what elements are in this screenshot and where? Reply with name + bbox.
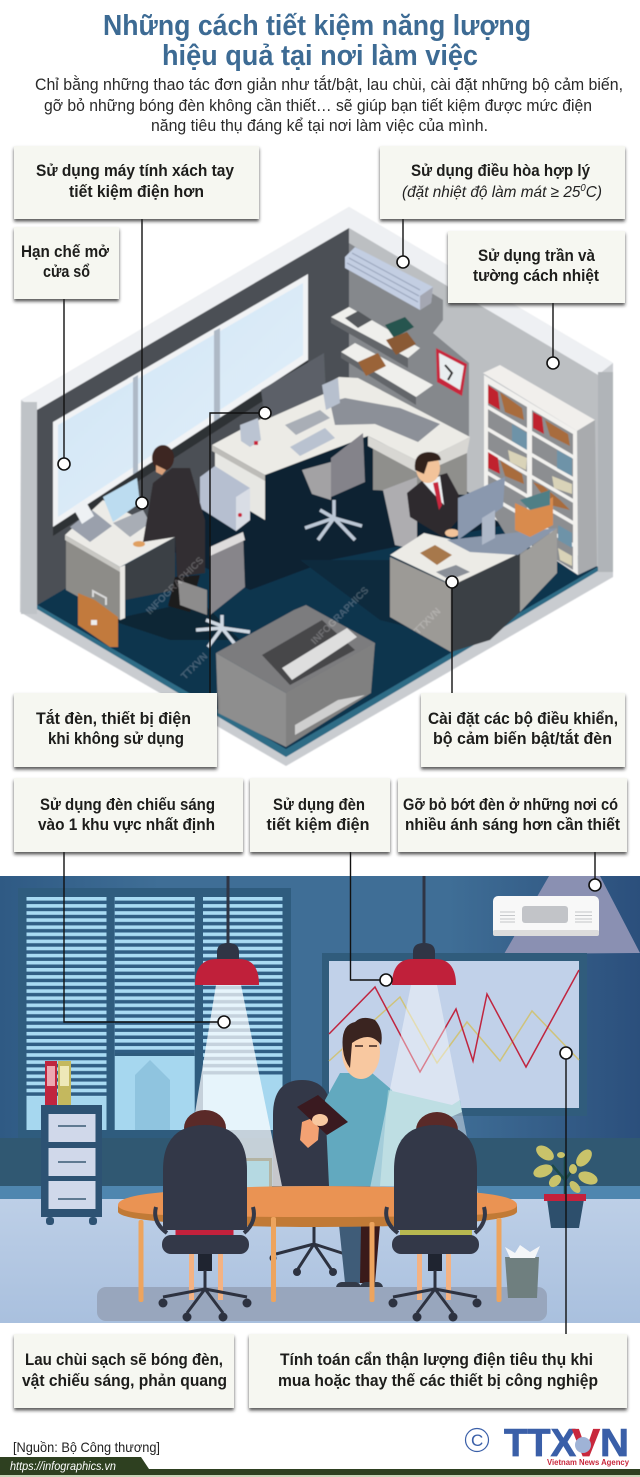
wall clock	[436, 348, 467, 396]
filing cabinet and folders	[41, 1061, 102, 1225]
callout: sensors: bộ cảm biến bật/tắt đèn	[433, 729, 612, 748]
logo: TTXVN: N	[600, 1422, 629, 1465]
lamp light cones	[183, 985, 480, 1203]
wall shelves with books	[331, 307, 433, 405]
callout: switch off: khi không sử dụng	[48, 730, 184, 748]
plant	[532, 1142, 599, 1228]
source note: [Nguồn: Bộ Công thương]	[13, 1439, 160, 1455]
front desk with monitor	[390, 477, 557, 652]
back office chair	[270, 1080, 345, 1276]
laptop	[245, 1158, 280, 1203]
callout: insulation: Sử dụng trần và	[478, 247, 596, 265]
callout: cleaning	[14, 1334, 234, 1408]
footer bar	[0, 1457, 640, 1477]
callout: air conditioning	[380, 146, 625, 219]
intro text: năng tiêu thụ đáng kể tại nơi làm việc của mình.	[151, 117, 488, 135]
L-shaped desk with computer	[212, 353, 470, 520]
watermarks: INFOGRAPHICS	[144, 555, 207, 617]
trash bin	[505, 1245, 540, 1298]
connector lines and dots	[58, 219, 601, 1334]
isometric office illustration	[20, 207, 613, 766]
air conditioner	[345, 247, 433, 310]
left foreground seated person and chair	[155, 1110, 254, 1322]
callout: switch off: Tắt đèn, thiết bị điện	[36, 709, 191, 728]
intro text: Chỉ bằng những thao tác đơn giản như tắt/bật, lau chùi, cài đặt những bộ cảm biến,	[35, 75, 623, 94]
watermarks	[144, 555, 443, 682]
callout: task lighting: Sử dụng đèn chiếu sáng	[40, 796, 215, 814]
callout: efficient lamps: Sử dụng đèn	[273, 796, 365, 814]
office chair lower left	[178, 532, 250, 648]
rug	[97, 1287, 547, 1321]
dado and floor	[0, 1138, 640, 1323]
callout: switch off	[14, 693, 217, 767]
computer tower on floor	[200, 466, 250, 531]
title	[103, 10, 531, 72]
callout: cleaning: vật chiếu sáng, phản quang	[22, 1372, 227, 1390]
callout: air conditioning: (đặt nhiệt độ làm mát ≥ 25	[402, 184, 588, 201]
callout: task lighting	[14, 778, 243, 852]
callout: windows: Hạn chế mở	[21, 243, 109, 261]
intro text: gỡ bỏ những bóng đèn không cần thiết… sẽ giúp bạn tiết kiệm được mức điện	[44, 97, 592, 115]
wall	[0, 876, 640, 1138]
callout: sensors	[421, 693, 625, 767]
briefcase	[78, 591, 118, 647]
title: Những cách tiết kiệm năng lượng	[103, 10, 531, 42]
office chair upper center	[302, 433, 365, 540]
callout: laptop	[14, 146, 259, 219]
watermarks: INFOGRAPHICS	[309, 585, 372, 647]
callout: cleaning: Lau chùi sạch sẽ bóng đèn,	[25, 1351, 223, 1369]
callout: insulation	[448, 231, 625, 303]
logo: TTXVN: V	[572, 1422, 600, 1465]
callout: insulation: tường cách nhiệt	[473, 267, 599, 285]
callout: remove lamps: Gỡ bỏ bớt đèn ở những nơi có	[403, 796, 618, 814]
logo: TTXVN: Vietnam News Agency	[547, 1458, 630, 1467]
callout: efficient lamps: tiết kiệm điện	[266, 816, 370, 834]
callout: efficient lamps	[250, 778, 390, 852]
right foreground seated person and chair	[386, 1112, 485, 1322]
callout: industrial equipment: Tính toán cẩn thận lượng điện tiêu thụ khi	[280, 1351, 593, 1369]
callout: industrial equipment: mua hoặc thay thế các thiết bị công nghiệp	[278, 1372, 598, 1390]
intro text	[35, 75, 623, 135]
callout: air conditioning: Sử dụng điều hòa hợp lý	[411, 162, 591, 180]
sofa	[216, 605, 375, 747]
watermarks: TTXVN	[179, 651, 210, 682]
windows	[53, 274, 308, 536]
conference table	[118, 1186, 517, 1302]
callout: windows	[14, 227, 119, 299]
room shell	[20, 207, 613, 766]
logo: TTXVN: TTX	[504, 1422, 576, 1465]
bookcase	[483, 365, 597, 575]
callout: remove lamps: nhiều ánh sáng hơn cần thiết	[405, 816, 620, 834]
watermarks: TTXVN	[412, 606, 443, 637]
footer bar: https://infographics.vn	[10, 1459, 116, 1473]
callout: laptop: tiết kiệm điện hơn	[69, 183, 204, 201]
whiteboard with line chart	[322, 953, 587, 1116]
callout: remove lamps	[398, 778, 627, 852]
worker seated at desk	[383, 452, 460, 550]
callout: air conditioning: C)	[586, 184, 602, 201]
meeting room illustration	[0, 876, 640, 1323]
pendant lamps	[195, 876, 456, 985]
callout: sensors: Cài đặt các bộ điều khiển,	[428, 710, 618, 728]
air conditioner and its light cone	[493, 876, 640, 954]
callout: air conditioning: 0	[580, 183, 586, 194]
callout: industrial equipment	[249, 1334, 627, 1408]
worker standing at desk	[133, 445, 205, 612]
callout: laptop: Sử dụng máy tính xách tay	[36, 162, 235, 180]
small desk with laptop	[65, 478, 175, 620]
logo: TTXVN: C	[471, 1431, 483, 1450]
callout: task lighting: vào 1 khu vực nhất định	[38, 816, 215, 834]
window with blinds	[18, 888, 291, 1138]
presenter	[297, 1018, 462, 1296]
logo: TTXVN	[466, 1422, 630, 1467]
callout: windows: cửa sổ	[43, 263, 90, 281]
title: hiệu quả tại nơi làm việc	[162, 40, 478, 72]
